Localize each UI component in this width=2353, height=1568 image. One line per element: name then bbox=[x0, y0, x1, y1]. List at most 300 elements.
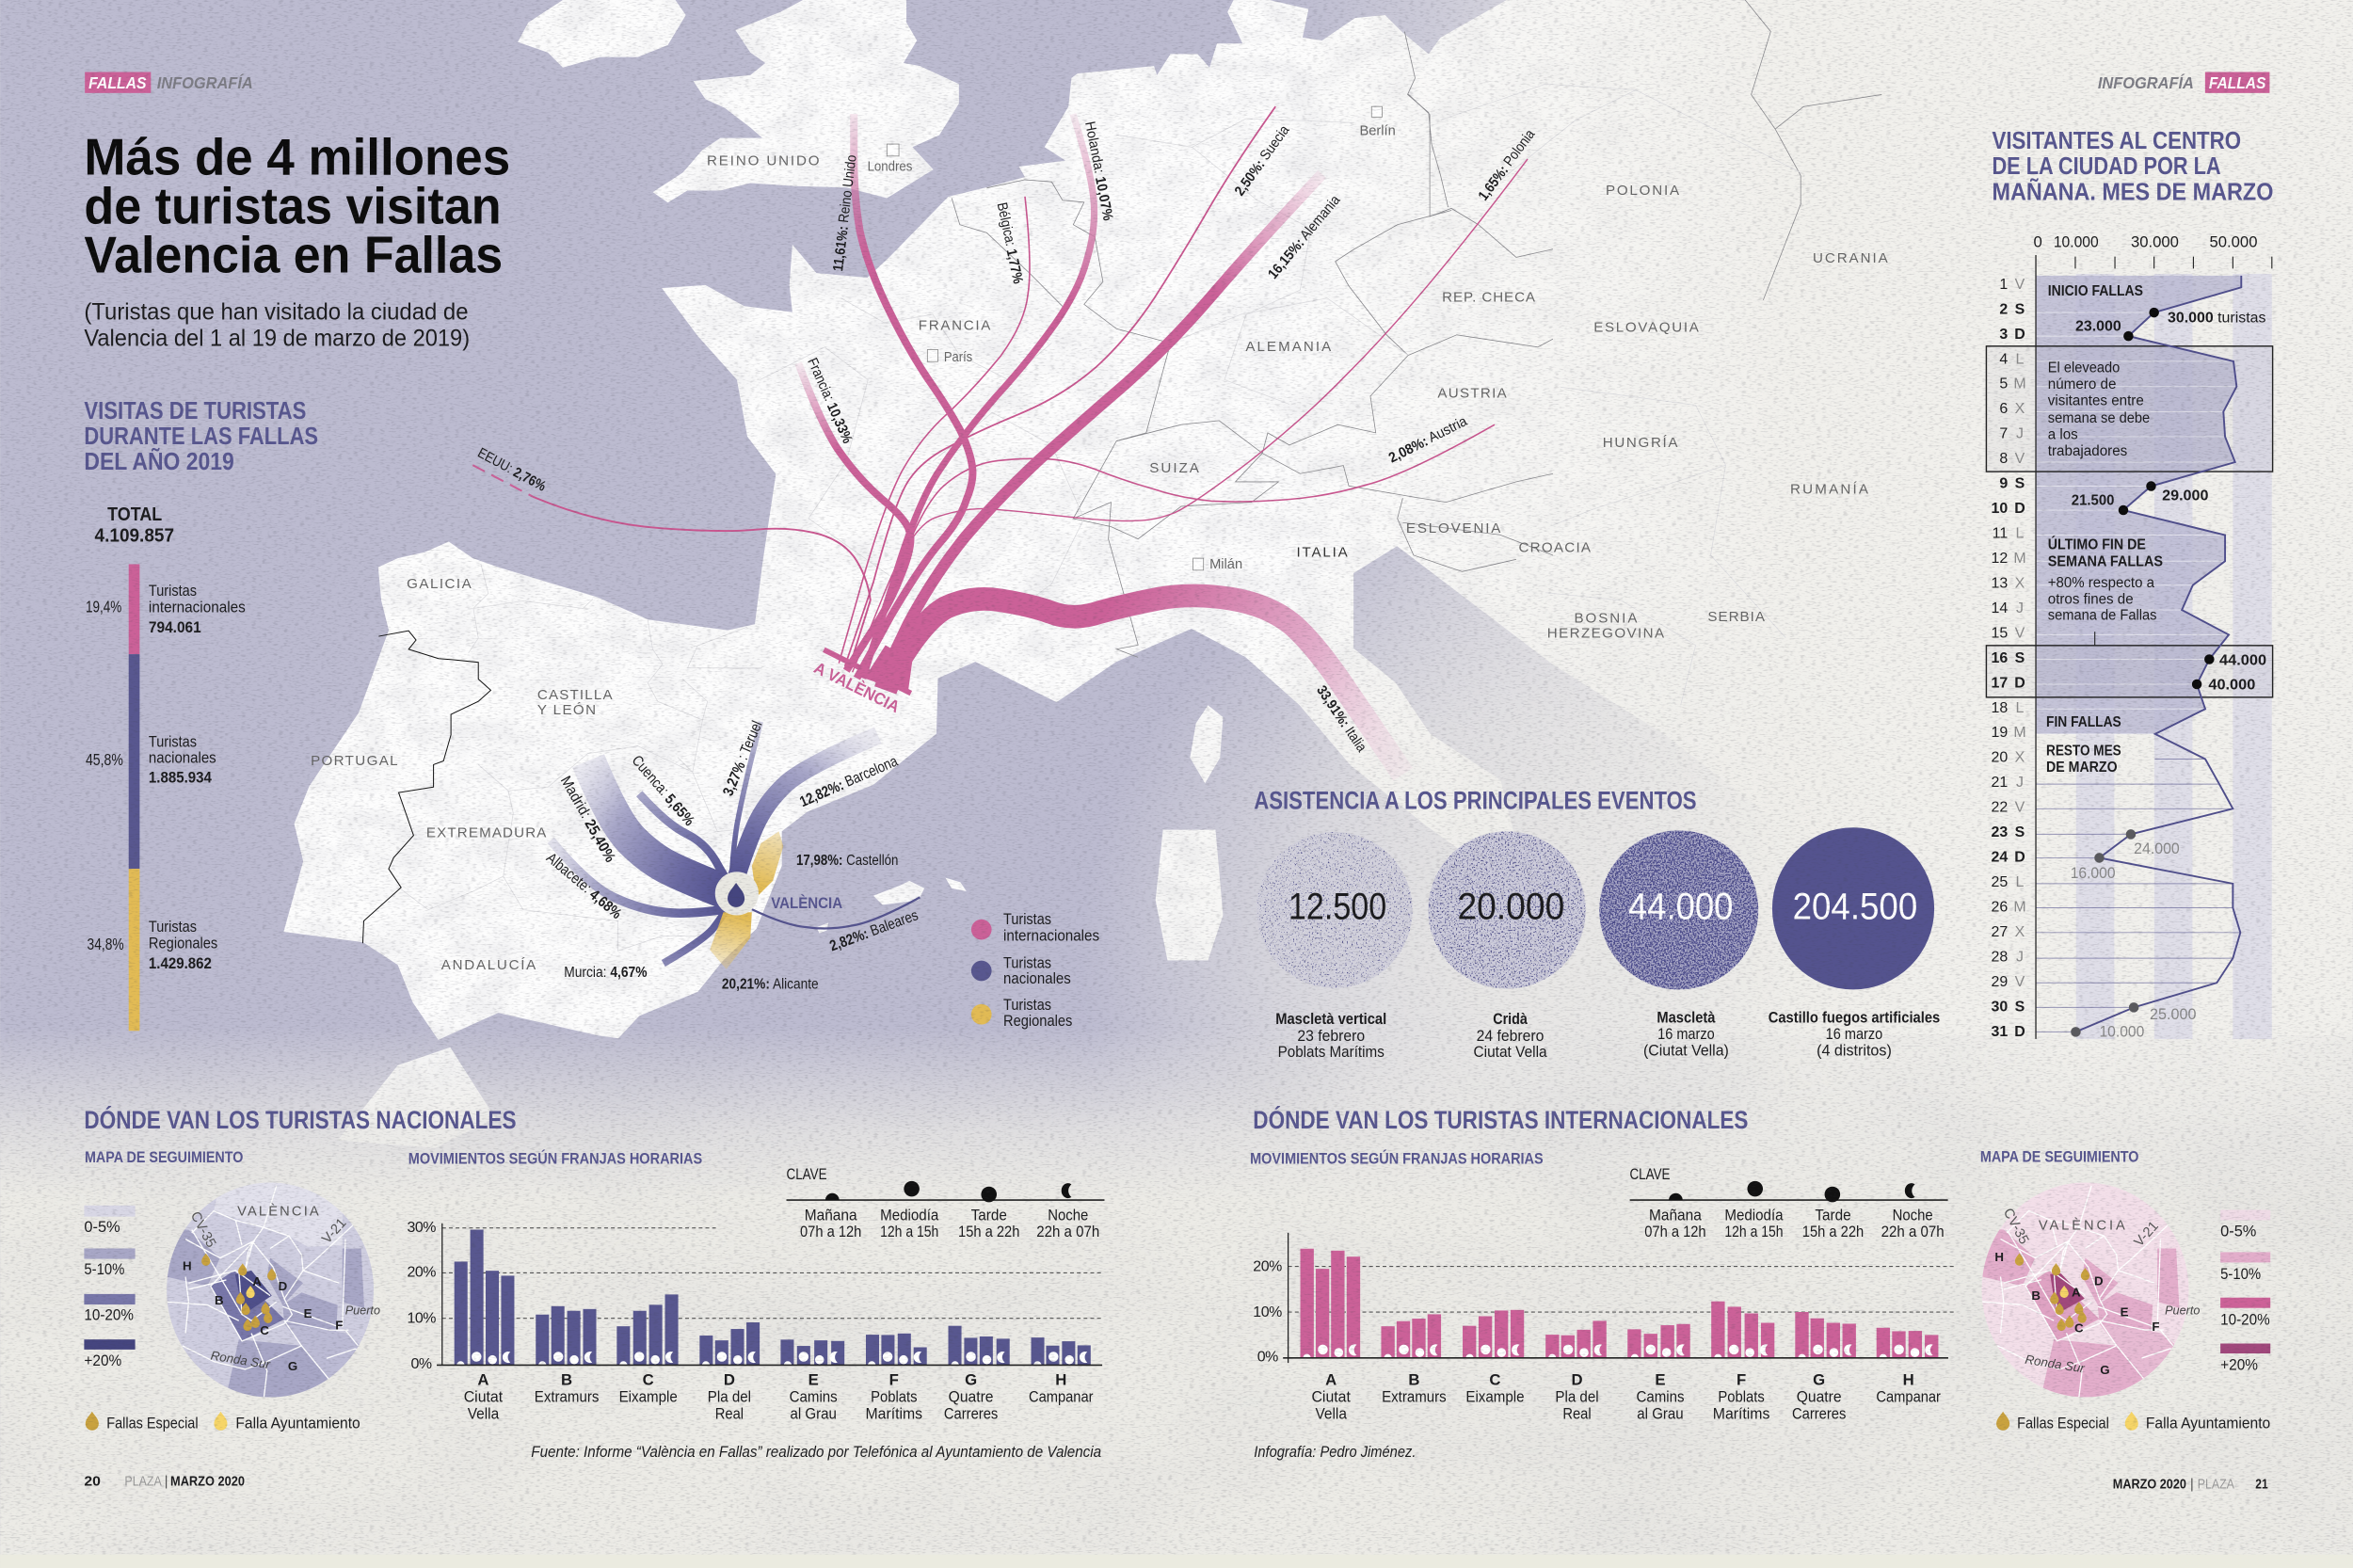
background bands bbox=[2076, 274, 2272, 1039]
event captions: Ciutat Vella bbox=[1474, 1043, 1547, 1061]
weekday labels: L bbox=[2016, 874, 2025, 890]
annotations and values: El eleveado bbox=[2048, 360, 2120, 376]
day labels bbox=[1991, 277, 2008, 1040]
map: country, region and city labels: POLONIA bbox=[1606, 183, 1680, 199]
title: de turistas visitan bbox=[84, 177, 502, 235]
legend: fallas markers: Falla Ayuntamiento bbox=[2146, 1415, 2270, 1432]
legend: percentage scale: 5-10% bbox=[84, 1260, 125, 1278]
subtitle: (Turistas que han visitado la ciudad de bbox=[84, 300, 469, 326]
panel: where national tourists go bbox=[84, 1105, 1104, 1489]
day labels: 8 bbox=[1999, 451, 2008, 467]
bar labels: Regionales bbox=[149, 935, 217, 952]
bar chart: international by district: Camins bbox=[1636, 1388, 1684, 1406]
map: València districts, international: Ronda Sur bbox=[2025, 1352, 2086, 1376]
annotations and values: otros fines de bbox=[2048, 592, 2134, 608]
legend: fallas markers: Fallas Especial bbox=[2017, 1415, 2109, 1432]
bar chart: national by district: Poblats bbox=[871, 1388, 918, 1406]
key: time bands: Mediodía bbox=[1724, 1206, 1784, 1224]
day labels: 27 bbox=[1991, 924, 2008, 940]
day labels: 13 bbox=[1991, 575, 2008, 591]
heading: visitas de turistas: DEL AÑO 2019 bbox=[84, 447, 234, 475]
legend: percentage scale: +20% bbox=[2220, 1356, 2258, 1374]
annotations and values: 24.000 bbox=[2134, 840, 2180, 857]
weekday labels: S bbox=[2015, 301, 2025, 317]
weekday labels: D bbox=[2014, 675, 2025, 691]
weekday labels: M bbox=[2013, 551, 2026, 567]
bar chart: national by district: Camins bbox=[790, 1388, 838, 1406]
bar chart: national by district: Pla del bbox=[708, 1388, 751, 1406]
map: country, region and city labels: HERZEGOVINA bbox=[1547, 626, 1665, 642]
key: time bands: 07h a 12h bbox=[1644, 1223, 1706, 1240]
day labels: 22 bbox=[1991, 800, 2008, 816]
source note: Fuente: Informe “València en Fallas” realizado por Telefónica al Ayuntamiento de Valencia bbox=[531, 1443, 1101, 1461]
legend: percentage scale: 0-5% bbox=[2220, 1223, 2257, 1240]
bar chart: national by district: E bbox=[808, 1371, 819, 1389]
bubble: 204.500 bbox=[1772, 827, 1934, 989]
total figure: TOTAL bbox=[107, 504, 163, 525]
subheading: mapa de seguimiento: MAPA DE SEGUIMIENTO bbox=[1980, 1148, 2138, 1166]
vertical axis bbox=[2035, 255, 2037, 1039]
bar chart: national by district: Marítims bbox=[866, 1404, 922, 1422]
labels: international flow percentages: Holanda: 10,07% bbox=[1081, 120, 1116, 222]
header tag right: INFOGRAFÍA bbox=[2098, 72, 2194, 92]
bar chart: international by district: 0% bbox=[1257, 1349, 1278, 1365]
weekday labels: J bbox=[2016, 775, 2024, 791]
heading: visitas de turistas: VISITAS DE TURISTAS bbox=[84, 396, 306, 424]
day labels: 28 bbox=[1991, 949, 2008, 965]
heading: visitantes al centro bbox=[1992, 126, 2273, 206]
map: València districts, international: C bbox=[2074, 1320, 2084, 1335]
key: time bands: Noche bbox=[1893, 1206, 1933, 1224]
key: time bands: 12h a 15h bbox=[1724, 1223, 1784, 1240]
bar chart: international by district: Eixample bbox=[1465, 1388, 1525, 1406]
map: València districts, national: Puerto bbox=[345, 1304, 380, 1318]
header tag left: INFOGRAFÍA bbox=[157, 72, 253, 92]
legend: percentage scale: 5-10% bbox=[2220, 1265, 2261, 1283]
title bbox=[84, 128, 510, 283]
title: Valencia en Fallas bbox=[84, 225, 503, 283]
key: time bands: CLAVE bbox=[1629, 1165, 1671, 1183]
event captions: (4 distritos) bbox=[1817, 1041, 1892, 1059]
annotations and values: FIN FALLAS bbox=[2046, 714, 2121, 730]
footer left: 20 bbox=[84, 1473, 101, 1489]
map: country, region and city labels: Londres bbox=[868, 159, 913, 175]
day labels: 18 bbox=[1991, 700, 2008, 716]
bar labels: Turistas bbox=[149, 582, 197, 600]
footer right: PLAZA bbox=[2198, 1477, 2235, 1493]
legend: fallas markers: Falla Ayuntamiento bbox=[235, 1415, 360, 1432]
key: time bands: Tarde bbox=[1815, 1206, 1851, 1224]
title: Más de 4 millones bbox=[84, 128, 510, 186]
bar chart: national by district: H bbox=[1055, 1371, 1066, 1389]
weekday labels: J bbox=[2016, 426, 2024, 442]
event captions: 16 marzo bbox=[1826, 1025, 1882, 1043]
day labels: 29 bbox=[1991, 974, 2008, 990]
event captions: 16 marzo bbox=[1657, 1025, 1715, 1043]
chart: international flows into València bbox=[472, 106, 1528, 775]
map: València districts, national: Ronda Sur bbox=[210, 1349, 272, 1371]
map: València districts, national: CV-35 bbox=[187, 1209, 218, 1250]
map: country, region and city labels bbox=[311, 106, 1889, 973]
subtitle: Valencia del 1 al 19 de marzo de 2019) bbox=[84, 327, 470, 352]
bubble: 44.000: 44.000 bbox=[1628, 886, 1733, 927]
annotations and values: trabajadores bbox=[2048, 443, 2127, 459]
annotations and values: visitantes entre bbox=[2048, 392, 2144, 408]
bar chart: international by district: H bbox=[1903, 1371, 1914, 1389]
bar chart: international by district: Pla del bbox=[1555, 1388, 1599, 1406]
bar chart: national by district: C bbox=[643, 1371, 654, 1389]
map: València districts, international: V-21 bbox=[2132, 1219, 2162, 1250]
legend: percentage scale bbox=[84, 1206, 136, 1369]
map: València districts, national: B bbox=[215, 1293, 224, 1307]
bar chart: international by district: G bbox=[1813, 1371, 1825, 1389]
key: time bands: 22h a 07h bbox=[1881, 1223, 1945, 1240]
bar chart: national by district: F bbox=[889, 1371, 899, 1389]
map: València districts, international: E bbox=[2121, 1304, 2129, 1319]
credit note: Infografía: Pedro Jiménez. bbox=[1254, 1443, 1416, 1461]
bar chart: national by district: Vella bbox=[468, 1404, 500, 1422]
bar chart: international by district: C bbox=[1489, 1371, 1500, 1389]
subtitle bbox=[84, 300, 470, 352]
day gridlines bbox=[2037, 312, 2240, 1032]
map: València districts, international: G bbox=[2100, 1363, 2110, 1377]
day labels: 5 bbox=[1999, 376, 2008, 392]
weekday labels: M bbox=[2013, 900, 2026, 916]
annotations and values: a los bbox=[2048, 426, 2078, 442]
weekday labels: X bbox=[2015, 401, 2025, 417]
key: time bands: CLAVE bbox=[786, 1165, 827, 1183]
key: time bands: Mediodía bbox=[880, 1206, 939, 1224]
highlight boxes bbox=[1986, 346, 2273, 697]
bubble: 12.500 bbox=[1257, 832, 1413, 988]
axis scale: 10.000 bbox=[2054, 232, 2099, 250]
key: time bands: 12h a 15h bbox=[880, 1223, 938, 1240]
day labels: 25 bbox=[1991, 874, 2008, 890]
labels: international flow percentages: 16,15%: Alemania bbox=[1265, 192, 1344, 281]
map: València districts, international: B bbox=[2031, 1288, 2041, 1303]
stacked bar bbox=[129, 564, 139, 1031]
axis scale: 0 bbox=[2033, 232, 2042, 250]
day labels: 16 bbox=[1991, 650, 2008, 666]
bar chart: international by district: 20% bbox=[1253, 1258, 1282, 1274]
map: country, region and city labels: FRANCIA bbox=[919, 318, 991, 334]
day labels: 30 bbox=[1991, 999, 2008, 1015]
heading: turistas nacionales: DÓNDE VAN LOS TURISTAS NACIONALES bbox=[84, 1105, 517, 1134]
legend: tourist types on map: nacionales bbox=[1003, 969, 1071, 987]
key: time bands bbox=[786, 1165, 1104, 1240]
map: country, region and city labels: UCRANIA bbox=[1813, 250, 1889, 266]
labels: international flow percentages: Francia: 10,33% bbox=[804, 356, 856, 446]
map: country, region and city labels: ESLOVAQUIA bbox=[1593, 319, 1700, 335]
map: country, region and city labels: ESLOVENIA bbox=[1406, 520, 1501, 536]
icon: València marker bbox=[715, 872, 759, 915]
weekday labels: V bbox=[2015, 974, 2025, 990]
bar chart: national by district bbox=[407, 1220, 1102, 1422]
heading: visitas de turistas bbox=[84, 396, 318, 475]
map: València districts, national: C bbox=[260, 1323, 269, 1337]
map: València districts, international: H bbox=[1994, 1250, 2004, 1264]
map: Spanish regional borders bbox=[362, 564, 781, 951]
annotations and values: DE MARZO bbox=[2046, 760, 2118, 776]
day labels: 4 bbox=[1999, 351, 2008, 367]
day labels: 19 bbox=[1991, 725, 2008, 741]
header tag right: FALLAS bbox=[2209, 73, 2266, 92]
map: country, region and city labels: ITALIA bbox=[1297, 544, 1349, 560]
map: country, region and city labels: HUNGRÍA bbox=[1603, 435, 1678, 451]
map: country, region and city labels: PORTUGAL bbox=[311, 753, 398, 769]
annotations and values: número de bbox=[2048, 376, 2117, 392]
legend: tourist types on map: internacionales bbox=[1003, 927, 1099, 945]
bar chart: national by district: D bbox=[724, 1371, 735, 1389]
bar labels: 1.429.862 bbox=[149, 954, 212, 972]
bar chart: national by district: Eixample bbox=[619, 1388, 678, 1406]
labels: international flow percentages bbox=[475, 120, 1539, 756]
annotations and values: 30.000 turistas bbox=[2168, 311, 2265, 327]
legend: tourist types on map bbox=[971, 910, 1099, 1030]
panel: attendance at main events bbox=[1254, 785, 1940, 1061]
legend: percentage scale: +20% bbox=[84, 1352, 121, 1369]
map: region and country borders bbox=[362, 0, 1881, 951]
bar labels: internacionales bbox=[149, 598, 246, 616]
labels: national flow percentages: 20,21%: Alicante bbox=[722, 977, 819, 993]
map: country, region and city labels: GALICIA bbox=[407, 576, 472, 592]
footer left: MARZO 2020 bbox=[170, 1473, 245, 1489]
labels: national flow percentages: VALÈNCIA bbox=[771, 894, 842, 912]
labels: international flow percentages: 2,08%: Austria bbox=[1386, 413, 1470, 466]
annotations and values: 23.000 bbox=[2075, 319, 2121, 335]
labels: national flow percentages: Madrid: 25,40% bbox=[557, 774, 618, 865]
bar chart: national by district: 30% bbox=[407, 1220, 436, 1236]
map: country, region and city labels: SUIZA bbox=[1149, 460, 1200, 476]
map: València districts, national: H bbox=[183, 1258, 192, 1272]
map: València districts, international: A bbox=[2072, 1285, 2081, 1299]
bar chart: international by district bbox=[1253, 1233, 1954, 1422]
map: València districts, international: D bbox=[2094, 1273, 2104, 1288]
legend: tourist types on map: Regionales bbox=[1003, 1012, 1072, 1030]
event captions bbox=[1275, 1008, 1940, 1061]
bubble: 20.000 bbox=[1428, 831, 1586, 989]
event captions: Mascletà bbox=[1657, 1008, 1716, 1026]
weekday labels: V bbox=[2015, 451, 2025, 467]
map: València districts, national: D bbox=[279, 1279, 288, 1293]
map: València districts, national: VALÈNCIA bbox=[237, 1204, 319, 1220]
map: València districts, international bbox=[1973, 1176, 2200, 1402]
bar chart: international by district: D bbox=[1571, 1371, 1583, 1389]
key: time bands bbox=[1629, 1165, 1948, 1240]
weekday labels: V bbox=[2015, 800, 2025, 816]
weekday labels: D bbox=[2014, 501, 2025, 517]
map: country, region and city labels: SERBIA bbox=[1707, 609, 1766, 625]
weekday labels: D bbox=[2014, 327, 2025, 343]
key: time bands: 15h a 22h bbox=[958, 1223, 1019, 1240]
day labels: 23 bbox=[1991, 824, 2008, 840]
weekday labels: J bbox=[2016, 949, 2024, 965]
event captions: (Ciutat Vella) bbox=[1643, 1041, 1729, 1059]
annotations and values: 44.000 bbox=[2219, 653, 2266, 669]
footer right bbox=[2113, 1477, 2268, 1493]
legend: tourist types on map: Turistas bbox=[1003, 953, 1051, 971]
bar labels: 34,8% bbox=[88, 935, 124, 953]
bubble: 20.000: 20.000 bbox=[1457, 886, 1564, 927]
bar labels: Turistas bbox=[149, 732, 197, 750]
day labels: 14 bbox=[1991, 600, 2008, 616]
axis scale bbox=[2033, 232, 2272, 268]
bar chart: international by district: Poblats bbox=[1718, 1388, 1765, 1406]
map: València districts, national: A bbox=[252, 1274, 262, 1288]
key: time bands: Noche bbox=[1048, 1206, 1088, 1224]
day labels: 24 bbox=[1991, 850, 2008, 866]
axis scale: 30.000 bbox=[2131, 232, 2179, 250]
event captions: Cridà bbox=[1493, 1010, 1528, 1028]
bar chart: international by district: Campanar bbox=[1876, 1388, 1941, 1406]
bar labels: Turistas bbox=[149, 918, 197, 936]
subheading: movimientos: MOVIMIENTOS SEGÚN FRANJAS HORARIAS bbox=[408, 1150, 702, 1168]
legend: fallas markers: Fallas Especial bbox=[106, 1415, 199, 1432]
bar labels: nacionales bbox=[149, 749, 216, 767]
key: time bands: Tarde bbox=[971, 1206, 1007, 1224]
weekday labels: L bbox=[2016, 351, 2025, 367]
day labels: 1 bbox=[1999, 277, 2008, 293]
header tag left bbox=[85, 72, 253, 93]
heading: turistas internacionales: DÓNDE VAN LOS TURISTAS INTERNACIONALES bbox=[1253, 1105, 1748, 1134]
bar chart: international by district: B bbox=[1408, 1371, 1419, 1389]
heading: visitantes al centro: VISITANTES AL CENTRO bbox=[1992, 126, 2241, 154]
day labels: 10 bbox=[1991, 501, 2008, 517]
annotations and values: 21.500 bbox=[2072, 492, 2115, 508]
day labels: 9 bbox=[1999, 476, 2008, 492]
key: time bands: Mañana bbox=[805, 1206, 857, 1224]
legend: tourist types on map: Turistas bbox=[1003, 910, 1051, 928]
bar chart: national by district: B bbox=[561, 1371, 572, 1389]
header tag right bbox=[2098, 72, 2269, 93]
map: country, region and city labels: REP. CHECA bbox=[1442, 289, 1536, 305]
labels: national flow percentages bbox=[543, 719, 920, 993]
labels: national flow percentages: Albacete: 4,68% bbox=[543, 850, 625, 922]
bar chart: international by district: Quatre bbox=[1797, 1388, 1842, 1406]
event captions: Poblats Marítims bbox=[1278, 1043, 1385, 1061]
map: València districts, international: VALÈNCIA bbox=[2039, 1217, 2125, 1233]
labels: international flow percentages: 1,65%: Polonia bbox=[1475, 126, 1539, 203]
day labels: 2 bbox=[1999, 301, 2008, 317]
labels: national flow percentages: Murcia: 4,67% bbox=[564, 965, 648, 981]
map: country, region and city labels: REINO UNIDO bbox=[707, 152, 820, 168]
bar chart: national by district: Ciutat bbox=[464, 1388, 504, 1406]
total figure: 4.109.857 bbox=[95, 525, 174, 547]
map: country, region and city labels: BOSNIA bbox=[1574, 611, 1638, 627]
panel: daily visitors chart bbox=[1986, 126, 2273, 1041]
weekday labels: S bbox=[2015, 999, 2025, 1015]
data points bbox=[2071, 308, 2215, 1037]
map: València districts, national: V-21 bbox=[319, 1216, 349, 1247]
annotations and values: 40.000 bbox=[2208, 678, 2255, 694]
weekday labels: S bbox=[2015, 650, 2025, 666]
key: time bands: 22h a 07h bbox=[1036, 1223, 1099, 1240]
day labels: 17 bbox=[1991, 675, 2008, 691]
bar chart: international by district: al Grau bbox=[1637, 1404, 1684, 1422]
bubble: 44.000 bbox=[1599, 830, 1758, 989]
bar chart: international by district: E bbox=[1655, 1371, 1666, 1389]
event captions: Castillo fuegos artificiales bbox=[1769, 1008, 1940, 1026]
annotations and values: 16.000 bbox=[2071, 864, 2116, 882]
map: València districts, international: F bbox=[2152, 1320, 2160, 1334]
map: country, region and city labels: ANDALUCÍA bbox=[441, 957, 536, 973]
day labels: 26 bbox=[1991, 900, 2008, 916]
weekday labels: X bbox=[2015, 575, 2025, 591]
heading: visitantes al centro: DE LA CIUDAD POR LA bbox=[1992, 152, 2221, 180]
labels: international flow percentages: EEUU: 2,76% bbox=[475, 445, 549, 494]
footer right: | bbox=[2190, 1477, 2194, 1493]
annotations and values: +80% respecto a bbox=[2048, 575, 2154, 591]
event captions: Mascletà vertical bbox=[1275, 1010, 1386, 1028]
labels: international flow percentages: 2,50%: Suecia bbox=[1231, 122, 1293, 199]
bar chart: national by district: Extramurs bbox=[535, 1388, 599, 1406]
bar chart: international by district: 10% bbox=[1253, 1304, 1282, 1320]
heading: asistencia: ASISTENCIA A LOS PRINCIPALES EVENTOS bbox=[1254, 785, 1697, 814]
footer right: MARZO 2020 bbox=[2113, 1477, 2186, 1493]
map: country, region and city labels: Y LEÓN bbox=[537, 702, 596, 718]
legend: fallas markers bbox=[86, 1412, 360, 1432]
bar chart: national by district: Campanar bbox=[1029, 1388, 1094, 1406]
map: València districts, national: G bbox=[288, 1359, 297, 1373]
map: València districts, international: CV-35 bbox=[2000, 1206, 2031, 1247]
bar chart: international by district: Real bbox=[1562, 1404, 1592, 1422]
weekday labels: J bbox=[2016, 600, 2024, 616]
weekday labels: S bbox=[2015, 824, 2025, 840]
bar chart: national by district: Carreres bbox=[944, 1404, 998, 1422]
weekday labels: L bbox=[2016, 526, 2025, 542]
map: country, region and city labels: AUSTRIA bbox=[1437, 385, 1508, 401]
labels: national flow percentages: 3,27% : Teruel bbox=[720, 719, 766, 798]
bubble: 12.500: 12.500 bbox=[1289, 886, 1386, 927]
map: València districts, national bbox=[167, 1182, 380, 1397]
labels: international flow percentages: 11,61%: Reino Unido bbox=[830, 154, 860, 272]
weekday labels: M bbox=[2013, 376, 2026, 392]
legend: percentage scale bbox=[2220, 1209, 2270, 1374]
labels: international flow percentages: Bélgica: 1,77% bbox=[994, 201, 1027, 285]
weekday labels: X bbox=[2015, 750, 2025, 766]
bar chart: national by district: G bbox=[965, 1371, 977, 1389]
weekday labels: V bbox=[2015, 277, 2025, 293]
map: country, region and city labels: ALEMANIA bbox=[1245, 339, 1332, 355]
key: time bands: 07h a 12h bbox=[800, 1223, 861, 1240]
footer left bbox=[84, 1473, 245, 1489]
legend: tourist types on map: Turistas bbox=[1003, 996, 1051, 1014]
day labels: 31 bbox=[1991, 1024, 2008, 1040]
label: destination A València: A VALÈNCIA bbox=[811, 657, 904, 716]
line series bbox=[2075, 276, 2241, 1032]
labels: international flow percentages: 33,91%: Italia bbox=[1314, 682, 1369, 756]
day labels: 6 bbox=[1999, 401, 2008, 417]
key: time bands: Mañana bbox=[1649, 1206, 1702, 1224]
bar chart: national by district: 0% bbox=[410, 1356, 432, 1372]
bar chart: national by district: al Grau bbox=[790, 1404, 837, 1422]
annotations and values: RESTO MES bbox=[2046, 744, 2121, 760]
footer left: PLAZA bbox=[124, 1473, 163, 1489]
day labels: 7 bbox=[1999, 426, 2008, 442]
bar labels: 1.885.934 bbox=[149, 769, 213, 787]
map: València districts, international: Puerto bbox=[2165, 1304, 2200, 1317]
footer right: 21 bbox=[2255, 1477, 2268, 1493]
annotations and values: 29.000 bbox=[2162, 488, 2209, 504]
bar chart: national by district: 10% bbox=[407, 1310, 436, 1326]
bubble: 204.500: 204.500 bbox=[1793, 886, 1917, 927]
bar chart: international by district: Marítims bbox=[1713, 1404, 1769, 1422]
axis scale: 50.000 bbox=[2209, 232, 2258, 250]
annotations and values: semana de Fallas bbox=[2048, 607, 2157, 623]
map: country, region and city labels: CASTILLA bbox=[537, 687, 613, 703]
panel: total tourists stacked bar bbox=[84, 396, 318, 1031]
labels: national flow percentages: 17,98%: Castellón bbox=[796, 853, 898, 869]
